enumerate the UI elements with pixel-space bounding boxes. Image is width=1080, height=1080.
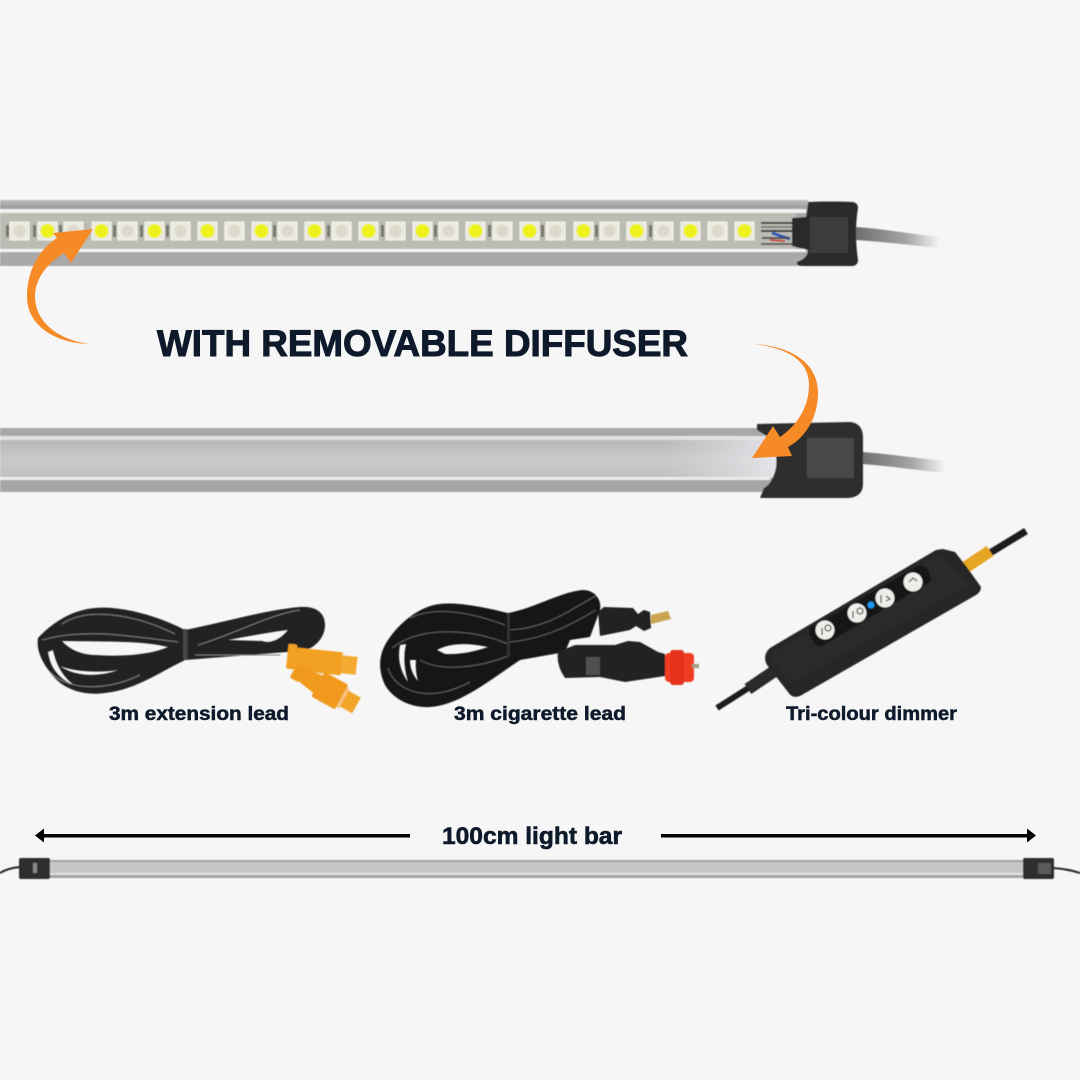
arrow: orange, pointing at diffuser: [752, 344, 818, 458]
dimmer buttons: [816, 572, 922, 640]
product: cigarette lead: [380, 590, 699, 707]
cable highlights: [42, 610, 300, 687]
left end cap: [19, 858, 50, 879]
dimension label: 100cm light bar: [442, 823, 622, 850]
cable coil: cigarette lead: [380, 590, 600, 707]
product: tri-colour dimmer: [717, 531, 1026, 708]
LED strip: [6, 222, 754, 240]
arrow: orange, pointing at LED strip: [27, 229, 93, 344]
orange connector: lower: [287, 658, 363, 718]
dimension arrow: left: [35, 828, 410, 842]
aluminium channel: top bar: [0, 200, 808, 266]
cable: middle bar: [862, 452, 945, 473]
right end cap: [1023, 858, 1054, 879]
dimmer top face: [768, 553, 968, 684]
end cap: middle bar: [757, 422, 863, 498]
cigarette plug: [558, 641, 699, 685]
cable coil: extension lead: [38, 607, 325, 694]
dimmer cables: [717, 531, 1026, 708]
aluminium channel: middle bar: [0, 428, 780, 492]
orange connector: upper: [286, 644, 358, 677]
heading: WITH REMOVABLE DIFFUSER: [157, 323, 688, 364]
cable tie: [183, 629, 188, 660]
dimension arrow: right: [661, 828, 1036, 842]
cable ties: [507, 613, 510, 657]
button glyphs: [822, 578, 917, 635]
label: extension lead: 3m extension lead: [109, 704, 289, 725]
full-length light bar: [0, 858, 1080, 879]
dimmer button plate: [809, 566, 931, 647]
cable highlights: [388, 596, 596, 694]
cable: top bar: [856, 227, 940, 248]
dimmer body: [765, 549, 981, 697]
label: dimmer: Tri-colour dimmer: [786, 704, 958, 725]
label: cigarette lead: 3m cigarette lead: [454, 704, 626, 725]
bar body: [48, 860, 1026, 878]
bar cables: [0, 867, 20, 873]
end cap: top bar: [792, 202, 858, 266]
DC connector: [598, 607, 671, 636]
wires: [761, 223, 795, 244]
blue indicator: [868, 602, 874, 608]
light bar without diffuser: [0, 200, 940, 266]
product: extension lead: [38, 607, 363, 718]
light bar with diffuser: [0, 422, 945, 498]
